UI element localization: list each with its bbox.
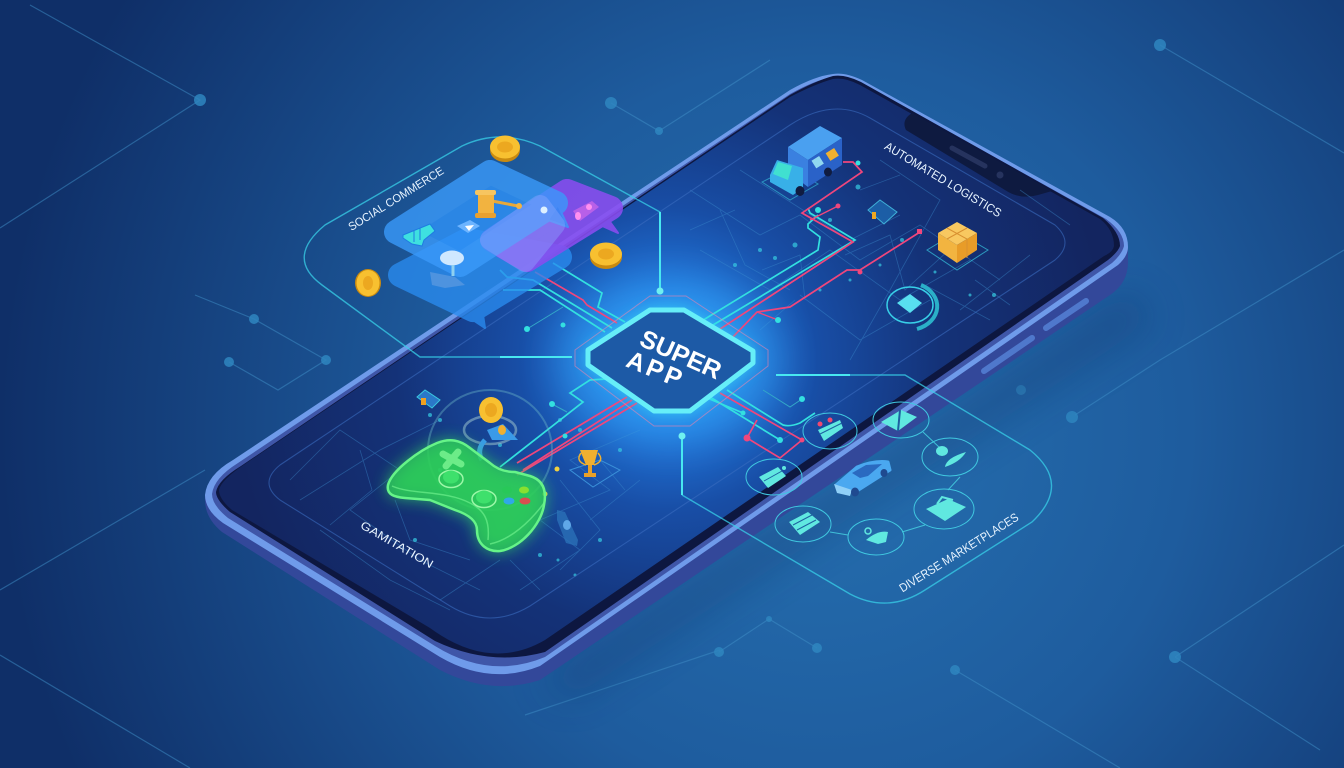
heading: diverse marketplaces: DIVERSE MARKETPLACES: [897, 510, 1021, 595]
icon: chip card: [417, 390, 440, 408]
gamification cluster: [388, 390, 620, 551]
icon: pin: [440, 250, 464, 266]
phone body side: [205, 74, 1128, 686]
thumb card: [557, 510, 578, 546]
phone shadow: [540, 290, 1155, 700]
heading: automated logistics: AUTOMATED LOGISTICS: [882, 139, 1004, 220]
car: [834, 462, 890, 496]
phone side buttons: [984, 301, 1086, 371]
marketplace icon: briefcase: [914, 489, 974, 529]
coin: right: [590, 242, 622, 269]
bubble: purple: [492, 191, 618, 260]
logistics cluster: [762, 126, 988, 329]
marketplace icon: user: [922, 438, 978, 476]
cardboard box: [927, 222, 988, 270]
hub label: APP: [622, 346, 689, 394]
circuit lines to social commerce: [500, 263, 625, 332]
coin: left: [355, 269, 381, 297]
gamepad body: [388, 440, 545, 551]
marketplace icon: grocery bottom: [775, 506, 831, 542]
phone notch: [904, 113, 1052, 197]
dot: [540, 206, 548, 214]
map dots: [413, 184, 996, 576]
hub label: SUPER: [636, 325, 726, 385]
phone dark border: [216, 76, 1120, 657]
screen inset panel outline: [269, 109, 1065, 618]
marketplace icon: grocery top: [803, 413, 857, 449]
icon: shield: [487, 424, 518, 440]
map network, faint: [290, 160, 1070, 610]
circuit lines to logistics: [700, 160, 922, 342]
heading: gamification: GAMITATION: [358, 520, 435, 571]
gamepad sticks: [439, 470, 463, 488]
super app hub: [575, 296, 768, 426]
bubble: main blue: [396, 172, 568, 265]
icon: heart chip: [457, 220, 480, 233]
heading: social commerce: SOCIAL COMMERCE: [347, 165, 447, 234]
gamepad d-pad: [443, 452, 461, 466]
background nodes: [194, 39, 1181, 675]
small ring: [464, 416, 516, 444]
icon: cart: [403, 224, 435, 246]
panel outline: diverse marketplaces: [682, 375, 1052, 603]
bubble: glass overlap: [490, 205, 555, 262]
bubble: lower blue: [400, 240, 560, 328]
icon: purple chip: [573, 201, 599, 221]
marketplaces cluster: [746, 402, 978, 555]
node: social connector: [656, 288, 664, 294]
node: marketplaces connector: [678, 432, 686, 440]
circuit lines to gamification: [500, 378, 637, 496]
phone inner bezel: [212, 77, 1124, 666]
coins: [355, 136, 622, 297]
social commerce bubbles: [396, 172, 618, 328]
icon: gavel: [475, 190, 522, 218]
hub octagon: [588, 310, 753, 411]
phone rim: [205, 74, 1128, 674]
coin: top: [490, 136, 520, 162]
panel outline: social commerce: [304, 137, 660, 357]
icon: parcel scanner: [868, 200, 897, 224]
truck: [762, 126, 842, 200]
trophy: [570, 450, 620, 487]
phone screen: [219, 79, 1114, 653]
connector lines: [830, 432, 960, 535]
phone: [205, 74, 1128, 686]
central glow: [560, 280, 780, 440]
icon: radar gauge: [887, 285, 937, 329]
marketplace icon: window: [873, 402, 929, 438]
marketplace icon: tag: [848, 519, 904, 555]
coin: game: [479, 397, 503, 423]
gamepad glow: [388, 440, 545, 551]
gamepad buttons: [502, 486, 512, 494]
circuit lines to marketplaces: [700, 390, 815, 458]
notch speaker and camera: [952, 148, 1004, 178]
halo ring: [428, 390, 552, 510]
hub outer ring: [575, 296, 768, 426]
gamepad inner lip: [392, 486, 544, 544]
marketplace icon: grocery left: [746, 459, 802, 495]
